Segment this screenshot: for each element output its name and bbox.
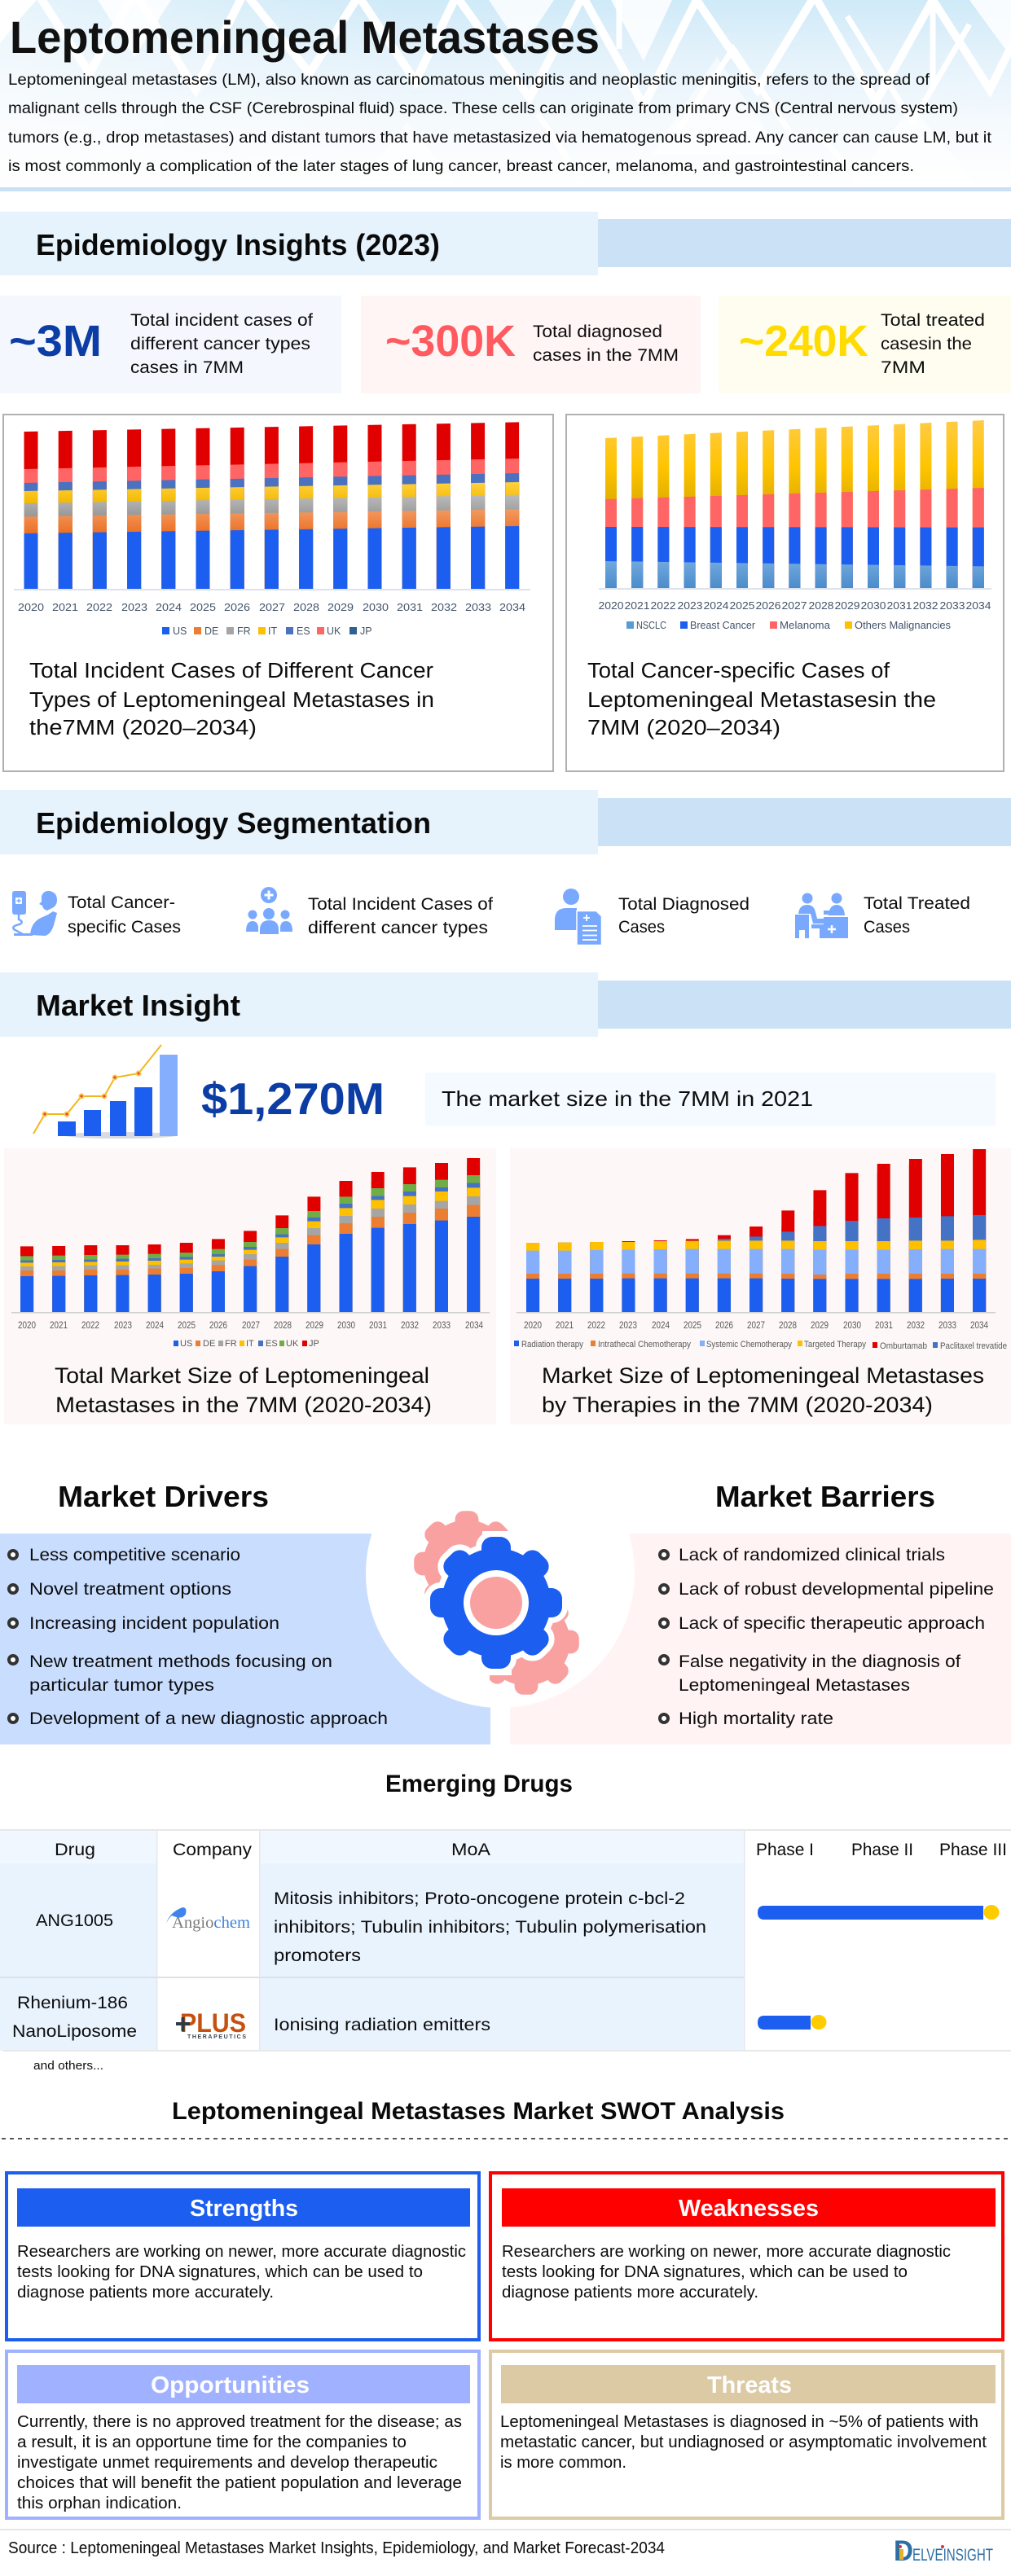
table row: ANG1005: inhibitors; Tubulin inhibitors; Tubulin polymerisation [274, 1918, 706, 1937]
intro paragraph: tumors (e.g., drop metastases) and distant tumors that have metastasized via hematogenous spread. Any cancer can cause LM, but it [8, 129, 992, 147]
caption: total market size [55, 1363, 432, 1417]
table header row: MoA [451, 1841, 490, 1859]
legend: total market size: IT [246, 1339, 254, 1349]
panel: threats: Leptomeningeal Metastases is diagnosed in ~5% of patients with [500, 2412, 978, 2431]
header background pattern [0, 0, 1011, 189]
section heading: Epidemiology Segmentation [0, 790, 1011, 854]
market size value: $1,270M [201, 1073, 385, 1124]
stacked bar chart: total market size [11, 1158, 499, 1331]
logo: Angiochem [166, 1907, 250, 1932]
stacked bar chart: total market size: 2020 [18, 1319, 36, 1331]
caption: market size by therapies [542, 1363, 984, 1417]
caption: incident cases: Types of Leptomeningeal Metastases in [29, 689, 434, 712]
KPI card: 240K: 7MM [881, 358, 925, 377]
KPI card: 240K: casesin the [881, 335, 972, 353]
legend: cancer-specific cases: Breast Cancer [690, 620, 755, 631]
stacked bar chart: cancer-specific cases: 2025 [730, 599, 754, 612]
stacked bar chart: market size by therapies: 2021 [556, 1319, 574, 1331]
legend: total market size [174, 1339, 319, 1349]
text: total incident cases: different cancer types [308, 919, 488, 937]
KPI card: 3M [0, 296, 341, 393]
stacked bar chart: total market size: 2025 [178, 1319, 196, 1331]
text: total diagnosed cases: Total Diagnosed [618, 895, 749, 914]
stacked bar chart: market size by therapies [516, 1149, 1004, 1331]
stacked bar chart: total market size: 2022 [81, 1319, 99, 1331]
text: total cancer-specific cases: specific Cases [68, 918, 181, 937]
stacked bar chart: incident cases: 2033 [465, 601, 491, 613]
section heading: Epidemiology Segmentation: Epidemiology Segmentation [36, 806, 431, 840]
market barriers list: Leptomeningeal Metastases [679, 1676, 910, 1695]
legend: cancer-specific cases: Melanoma [780, 620, 830, 631]
panel: weaknesses: Weaknesses [679, 2196, 819, 2222]
table header row: Company [173, 1841, 253, 1859]
legend: cancer-specific cases: Others Malignancies [855, 620, 951, 631]
panel: market barriers background [510, 1534, 1011, 1744]
stacked bar chart: market size by therapies: 2033 [938, 1319, 956, 1331]
panel: strengths [7, 2173, 479, 2340]
stacked bar chart: market size by therapies: 2024 [652, 1319, 670, 1331]
icon: gears [414, 1511, 579, 1701]
heading: market barriers: Market Barriers [715, 1480, 935, 1513]
panel: threats [490, 2351, 1003, 2518]
market drivers list [9, 1546, 388, 1728]
KPI card: 300K [361, 296, 701, 393]
KPI card: 3M: different cancer types [130, 335, 310, 353]
legend: total market size: JP [309, 1339, 319, 1349]
legend: market size by therapies: Systemic Chemotherapy [706, 1340, 792, 1349]
table row: Rhenium-186 NanoLiposome: Rhenium-186 [17, 1994, 128, 2012]
stacked bar chart: market size by therapies: 2027 [747, 1319, 765, 1331]
text: total cancer-specific cases: Total Cancer- [68, 893, 175, 912]
legend: total market size: UK [286, 1339, 299, 1349]
caption: market size by therapies: Market Size of Leptomeningeal Metastases [542, 1363, 984, 1388]
stacked bar chart: cancer-specific cases: 2029 [834, 599, 860, 612]
stacked bar chart: cancer-specific cases: 2024 [704, 599, 728, 612]
table header row [55, 1841, 1007, 1859]
text: total diagnosed cases: Cases [618, 918, 665, 937]
intro paragraph: malignant cells through the CSF (Cerebrospinal fluid) space. These cells can originate from primary CNS (Central nervous system) [8, 99, 958, 117]
logo: PLUS Therapeutics: THERAPEUTICS [187, 2034, 246, 2040]
stacked bar chart: incident cases: 2023 [121, 601, 147, 613]
legend: incident cases: US [173, 625, 187, 637]
title: Leptomeningeal Metastases [10, 11, 600, 63]
stacked bar chart: market size by therapies: 2034 [970, 1319, 988, 1331]
KPI card: 240K: Total treated [881, 311, 985, 330]
intro paragraph: is most commonly a complication of the later stages of lung cancer, breast cancer, melanoma, and gastrointestinal cancers. [8, 157, 914, 175]
phase bar: Rhenium-186 [758, 2015, 826, 2030]
stacked bar chart: market size by therapies: 2032 [907, 1319, 925, 1331]
legend: incident cases: ES [297, 625, 310, 637]
market drivers list: Novel treatment options [29, 1580, 231, 1599]
intro paragraph: Leptomeningeal metastases (LM), also known as carcinomatous meningitis and neoplastic meningitis, refers to the spread of [8, 71, 930, 89]
text: total treated cases [864, 894, 970, 937]
heading: market drivers: Market Drivers [58, 1480, 269, 1513]
table row: ANG1005 [36, 1889, 999, 1965]
stacked bar chart: cancer-specific cases [598, 420, 991, 612]
stacked bar chart: incident cases: 2034 [499, 601, 525, 613]
market drivers list: New treatment methods focusing on [29, 1652, 332, 1671]
text: total cancer-specific cases [68, 893, 181, 937]
stacked bar chart: total market size: 2032 [401, 1319, 419, 1331]
panel: cancer-specific cases chart [566, 415, 1004, 771]
stacked bar chart: incident cases: 2030 [363, 601, 389, 613]
panel: threats: is more common. [500, 2453, 626, 2472]
stacked bar chart: incident cases: 2022 [86, 601, 112, 613]
table: emerging drugs [0, 1829, 1011, 2052]
icon: rising bar chart with trend line [33, 1045, 178, 1139]
stacked bar chart: incident cases: 2026 [224, 601, 250, 613]
section heading: Market Insight: Market Insight [36, 989, 240, 1022]
panel: weaknesses: tests looking for DNA signatures, which can be used to [502, 2262, 908, 2281]
stacked bar chart: total market size: 2033 [433, 1319, 451, 1331]
stacked bar chart: incident cases: 2031 [397, 601, 423, 613]
stacked bar chart: market size by therapies: 2020 [524, 1319, 542, 1331]
KPI card: 3M: ~3M [9, 317, 102, 366]
stacked bar chart: cancer-specific cases: 2021 [624, 599, 650, 612]
market drivers list: Increasing incident population [29, 1614, 279, 1633]
stacked bar chart: incident cases: 2021 [52, 601, 78, 613]
text: total incident cases: Total Incident Cases of [308, 895, 493, 914]
legend: incident cases: DE [204, 625, 218, 637]
stacked bar chart: incident cases: 2028 [293, 601, 319, 613]
caption: incident cases: Total Incident Cases of Different Cancer [29, 660, 434, 682]
logo: Angiochem: Angiochem [172, 1914, 250, 1932]
stacked bar chart: cancer-specific cases: 2031 [886, 599, 912, 612]
legend: incident cases: IT [268, 625, 277, 637]
table header row: Phase III [939, 1841, 1007, 1859]
caption: cancer-specific cases [587, 660, 936, 739]
panel: strengths: Researchers are working on newer, more accurate diagnostic [17, 2242, 466, 2261]
icon: doctor and patient at desk [795, 893, 848, 938]
legend: incident cases: JP [360, 625, 372, 637]
table header row: Phase II [851, 1841, 913, 1859]
stacked bar chart: market size by therapies: 2029 [811, 1319, 829, 1331]
stacked bar chart: incident cases: 2027 [259, 601, 285, 613]
table row: Rhenium-186 NanoLiposome [12, 1994, 826, 2041]
market barriers list: High mortality rate [679, 1709, 833, 1728]
panel: threats: Threats [707, 2372, 792, 2398]
panel: opportunities: this orphan indication. [17, 2494, 182, 2512]
stacked bar chart: cancer-specific cases: 2034 [966, 599, 991, 612]
logo: DelveInsight [894, 2535, 993, 2567]
stacked bar chart: cancer-specific cases: 2030 [860, 599, 886, 612]
section heading: Market Insight [0, 972, 1011, 1037]
text: total diagnosed cases [618, 895, 749, 937]
source line: Source : Leptomeningeal Metastases Market Insights, Epidemiology, and Market Forecast-2034 [8, 2539, 665, 2557]
panel: opportunities: choices that will benefit the patient population and leverage [17, 2473, 462, 2492]
panel: total market size chart [4, 1148, 499, 1424]
caption: incident cases: the7MM (2020–2034) [29, 717, 257, 739]
icon: group of people with medical cross [246, 887, 292, 934]
intro paragraph [8, 71, 992, 175]
caption: total market size: Total Market Size of Leptomeningeal [55, 1363, 429, 1388]
stacked bar chart: total market size: 2031 [369, 1319, 387, 1331]
text: total treated cases: Cases [864, 918, 910, 937]
stacked bar chart: market size by therapies: 2025 [684, 1319, 701, 1331]
panel: market drivers background [0, 1534, 490, 1744]
stacked bar chart: incident cases: 2025 [190, 601, 216, 613]
panel: opportunities: investigate unmet requirements and develop therapeutic [17, 2453, 437, 2472]
legend: cancer-specific cases [626, 620, 951, 631]
KPI card: 300K: cases in the 7MM [533, 346, 679, 365]
panel: weaknesses [490, 2173, 1003, 2340]
stacked bar chart: cancer-specific cases: 2026 [756, 599, 780, 612]
stacked bar chart: cancer-specific cases: 2032 [912, 599, 938, 612]
stacked bar chart: total market size: 2026 [209, 1319, 227, 1331]
stacked bar chart: incident cases: 2020 [18, 601, 44, 613]
market drivers list: particular tumor types [29, 1676, 214, 1695]
stacked bar chart: incident cases: 2029 [327, 601, 354, 613]
panel: weaknesses: diagnose patients more accurately. [502, 2283, 758, 2302]
stacked bar chart: cancer-specific cases: 2027 [782, 599, 807, 612]
stacked bar chart: market size by therapies: 2030 [843, 1319, 861, 1331]
caption: cancer-specific cases: 7MM (2020–2034) [587, 717, 780, 739]
stacked bar chart: market size by therapies: 2028 [779, 1319, 797, 1331]
stacked bar chart: incident cases [14, 422, 530, 613]
section heading: Epidemiology Insights: Epidemiology Insights (2023) [36, 228, 440, 261]
stacked bar chart: market size by therapies: 2031 [875, 1319, 893, 1331]
legend: total market size: ES [266, 1339, 278, 1349]
callout: market size description: The market size in the 7MM in 2021 [442, 1086, 813, 1111]
stacked bar chart: incident cases: 2024 [156, 601, 182, 613]
legend: market size by therapies [514, 1340, 1007, 1351]
text: total treated cases: Total Treated [864, 894, 970, 913]
stacked bar chart: incident cases: 2032 [431, 601, 457, 613]
market barriers list: Lack of specific therapeutic approach [679, 1614, 985, 1633]
stacked bar chart: total market size: 2030 [337, 1319, 355, 1331]
table row: Rhenium-186 NanoLiposome: NanoLiposome [12, 2022, 137, 2041]
legend: market size by therapies: Radiation therapy [521, 1340, 583, 1349]
KPI card: 300K: Total diagnosed [533, 323, 662, 341]
caption: market size by therapies: by Therapies in the 7MM (2020-2034) [542, 1393, 933, 1417]
market barriers list: Lack of randomized clinical trials [679, 1546, 945, 1564]
panel: opportunities: Currently, there is no approved treatment for the disease; as [17, 2412, 462, 2431]
legend: market size by therapies: Intrathecal Chemotherapy [598, 1340, 691, 1349]
stacked bar chart: market size by therapies: 2022 [587, 1319, 605, 1331]
KPI card: 3M: Total incident cases of [130, 311, 313, 330]
panel: incident cases chart [3, 415, 553, 771]
table row: ANG1005: ANG1005 [36, 1911, 113, 1930]
stacked bar chart: total market size: 2028 [274, 1319, 292, 1331]
note: and others: and others... [33, 2059, 103, 2073]
stacked bar chart: market size by therapies: 2026 [715, 1319, 733, 1331]
panel: strengths: Strengths [190, 2196, 298, 2222]
icon: person with clipboard [555, 889, 601, 945]
market barriers list: Lack of robust developmental pipeline [679, 1580, 994, 1599]
panel: opportunities: a result, it is an opportune time for the companies to [17, 2433, 407, 2451]
legend: market size by therapies: Omburtamab [880, 1341, 927, 1351]
legend: total market size: US [180, 1339, 192, 1349]
legend: market size by therapies: Targeted Therapy [804, 1340, 866, 1349]
caption: cancer-specific cases: Total Cancer-specific Cases of [587, 660, 890, 682]
panel: strengths: diagnose patients more accurately. [17, 2283, 274, 2302]
panel: strengths: tests looking for DNA signatures, which can be used to [17, 2262, 423, 2281]
stacked bar chart: total market size: 2024 [146, 1319, 164, 1331]
callout: market size description [425, 1073, 996, 1126]
KPI card: 240K [719, 296, 1011, 393]
heading: SWOT analysis: Leptomeningeal Metastases Market SWOT Analysis [172, 2098, 785, 2125]
caption: incident cases [29, 660, 434, 739]
stacked bar chart: market size by therapies: 2023 [619, 1319, 637, 1331]
logo: DelveInsight: D [894, 2535, 913, 2567]
stacked bar chart: total market size: 2034 [465, 1319, 483, 1331]
stacked bar chart: cancer-specific cases: 2020 [598, 599, 624, 612]
KPI card: 300K: ~300K [385, 317, 516, 366]
panel: opportunities: Opportunities [151, 2372, 310, 2398]
legend: incident cases [162, 625, 372, 637]
heading: emerging drugs: Emerging Drugs [385, 1771, 573, 1797]
KPI card: 240K: ~240K [739, 317, 868, 366]
stacked bar chart: cancer-specific cases: 2033 [940, 599, 965, 612]
legend: incident cases: FR [237, 625, 251, 637]
table row: ANG1005: promoters [274, 1946, 361, 1965]
market barriers list [660, 1546, 994, 1728]
table row: ANG1005: Mitosis inhibitors; Proto-oncogene protein c-bcl-2 [274, 1889, 685, 1908]
panel: market size by therapies chart [510, 1148, 1011, 1424]
legend: incident cases: UK [327, 625, 341, 637]
panel: weaknesses: Researchers are working on newer, more accurate diagnostic [502, 2242, 951, 2261]
logo: PLUS Therapeutics: PLUS [180, 2008, 246, 2038]
stacked bar chart: total market size: 2027 [242, 1319, 260, 1331]
table row: Rhenium-186 NanoLiposome: Ionising radiation emitters [274, 2016, 490, 2034]
market drivers list: Less competitive scenario [29, 1546, 240, 1564]
stacked bar chart: cancer-specific cases: 2023 [678, 599, 702, 612]
legend: total market size: FR [225, 1339, 237, 1349]
stacked bar chart: cancer-specific cases: 2022 [650, 599, 676, 612]
icon: patient with IV drip [12, 891, 57, 936]
stacked bar chart: total market size: 2021 [50, 1319, 68, 1331]
stacked bar chart: total market size: 2023 [114, 1319, 132, 1331]
market barriers list: False negativity in the diagnosis of [679, 1652, 960, 1671]
legend: total market size: DE [203, 1339, 215, 1349]
phase bar: ANG1005 [758, 1905, 999, 1920]
text: total incident cases [308, 895, 493, 937]
KPI card: 3M: cases in 7MM [130, 358, 244, 377]
panel: threats: metastatic cancer, but undiagnosed or asymptomatic involvement [500, 2433, 987, 2451]
caption: total market size: Metastases in the 7MM (2020-2034) [55, 1393, 432, 1417]
section heading: Epidemiology Insights [0, 212, 1011, 275]
table header row: Phase I [756, 1841, 814, 1859]
stacked bar chart: total market size: 2029 [305, 1319, 323, 1331]
center circle cutout [366, 1439, 635, 1708]
table header row: Drug [55, 1841, 95, 1859]
market drivers list: Development of a new diagnostic approach [29, 1709, 388, 1728]
panel: opportunities [7, 2351, 479, 2518]
stacked bar chart: cancer-specific cases: 2028 [808, 599, 834, 612]
caption: cancer-specific cases: Leptomeningeal Metastasesin the [587, 689, 936, 712]
legend: cancer-specific cases: NSCLC [636, 620, 666, 631]
